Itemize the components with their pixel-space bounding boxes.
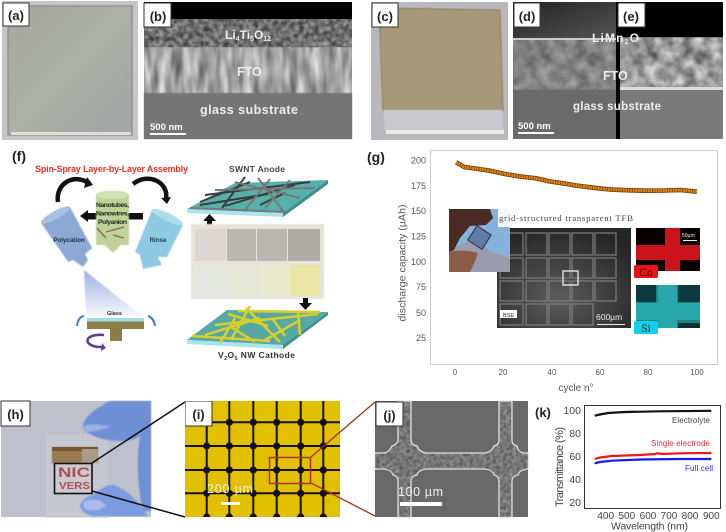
panel j: SEM of grid xyxy=(375,401,528,517)
y axis labels: 200 xyxy=(411,156,426,166)
zoom lines i to j xyxy=(311,402,375,516)
zoom lines h to i xyxy=(92,402,185,517)
label e: (e) xyxy=(623,9,639,24)
heading: cathode: O xyxy=(228,350,235,360)
bottle: rinse: Rinse xyxy=(150,237,167,244)
label j xyxy=(376,402,403,426)
x axis labels: 60 xyxy=(596,368,605,377)
heading: anode: SWNT Anode xyxy=(229,164,285,174)
SWNT anode plate xyxy=(187,177,328,217)
curve: single electrode xyxy=(595,453,711,459)
scale bar b: 500 nm xyxy=(150,122,183,133)
x axis labels xyxy=(597,511,720,522)
inset SEM: 600µm xyxy=(596,312,622,322)
y axis labels: 175 xyxy=(411,181,426,191)
bottle: polycation: Polycation xyxy=(53,237,85,244)
series labels: Electrolyte xyxy=(672,416,711,425)
heading: cathode: NW Cathode xyxy=(238,350,295,360)
label h: (h) xyxy=(7,407,24,422)
x axis labels xyxy=(453,368,704,377)
curve: electrolyte xyxy=(595,411,711,416)
scale bar d: 500 nm xyxy=(518,121,551,132)
x axis title: cycle n° xyxy=(558,383,594,394)
layer text: 5 xyxy=(250,36,254,43)
bottle: nanotubes: Polyanion xyxy=(98,219,127,226)
plot frame xyxy=(430,150,718,364)
x axis labels: 700 xyxy=(661,511,678,522)
panel a: LTO coated glass photo xyxy=(2,1,138,140)
x axis labels: 400 xyxy=(597,511,614,522)
label f: (f) xyxy=(12,148,26,164)
bottle: polycation xyxy=(39,204,92,267)
scale bar i: 200 µm xyxy=(207,482,253,496)
bottle: rinse xyxy=(135,206,185,269)
y axis labels: 80 xyxy=(569,428,581,440)
plot frame xyxy=(584,406,720,508)
down arrow xyxy=(299,298,312,310)
panel f: spin-spray layer-by-layer xyxy=(12,148,328,362)
inset Co map: Co xyxy=(639,267,653,279)
inset title: grid-structured transparent TFB xyxy=(499,213,633,223)
y axis labels: 100 xyxy=(563,405,581,417)
label i: (i) xyxy=(192,407,205,422)
capacity curve xyxy=(456,162,697,192)
layer text d/e: glass substrate xyxy=(573,101,661,113)
up arrow xyxy=(203,214,216,226)
label d: (d) xyxy=(519,9,535,24)
panel d and e: LMO SEM cross sections xyxy=(513,2,723,139)
y axis title: discharge capacity (µAh) xyxy=(396,204,408,322)
layer text: 4 xyxy=(236,36,240,43)
label g: (g) xyxy=(367,149,385,165)
photo of films xyxy=(191,224,324,299)
spray cone xyxy=(84,270,142,316)
layer text d/e: LiMn xyxy=(592,31,623,45)
layer text: Ti xyxy=(240,28,250,42)
x axis labels: 40 xyxy=(548,368,557,377)
label c: (c) xyxy=(377,9,393,24)
y axis title: Transmittance (%) xyxy=(554,427,566,507)
label i xyxy=(185,401,212,426)
inset photo xyxy=(449,209,512,272)
y axis labels xyxy=(411,156,426,343)
label j: (j) xyxy=(383,408,396,423)
x axis labels: 500 xyxy=(618,511,636,522)
x axis labels: 800 xyxy=(682,511,699,522)
inset Co map xyxy=(634,228,700,279)
y axis labels: 25 xyxy=(416,333,426,343)
y axis labels: 60 xyxy=(569,451,581,463)
inset SEM xyxy=(497,228,631,328)
series labels: Single electrode xyxy=(651,439,711,448)
y axis labels: 40 xyxy=(569,474,581,486)
layer text: glass substrate xyxy=(200,103,298,117)
bottle: nanotubes: Nanotubes, xyxy=(96,202,129,209)
cell text xyxy=(58,464,90,492)
inset Co map: 50µm xyxy=(682,233,695,239)
layer text d/e: 2 xyxy=(625,39,629,46)
layer text: 12 xyxy=(263,36,271,43)
label d xyxy=(514,3,540,27)
label h xyxy=(1,401,30,426)
layer text: O xyxy=(254,28,263,42)
panel h: transparent cell photo xyxy=(1,401,151,518)
x axis labels: 600 xyxy=(640,511,657,522)
y axis labels: 150 xyxy=(411,206,426,216)
layer text xyxy=(200,28,298,117)
series labels xyxy=(651,416,713,473)
scale bar j: 100 µm xyxy=(398,485,443,499)
layer text: Li xyxy=(225,28,236,42)
x axis labels: 900 xyxy=(703,511,720,522)
label b xyxy=(144,3,171,27)
bottle: nanotubes xyxy=(96,191,129,253)
cell text: VERS xyxy=(59,481,90,492)
cell text: NIC xyxy=(58,464,90,480)
inset Si map: Si xyxy=(641,323,651,335)
layer text d/e: O xyxy=(630,31,639,45)
horizontal arrow xyxy=(80,210,143,222)
x axis labels: 80 xyxy=(644,368,653,377)
y axis labels: 100 xyxy=(411,257,426,267)
heading: cathode: 2 xyxy=(224,356,227,362)
heading: assembly: Spin-Spray Layer-by-Layer Assembly xyxy=(35,164,188,174)
spin coater xyxy=(77,311,155,351)
x axis labels: 100 xyxy=(690,368,704,377)
heading: cathode: V xyxy=(218,350,224,360)
y axis labels: 125 xyxy=(411,232,426,242)
label e xyxy=(618,3,645,27)
heading: cathode: 5 xyxy=(235,356,238,362)
panel b: LTO SEM cross section xyxy=(144,2,352,139)
panel g: cycling chart xyxy=(367,149,718,394)
panel i: grid micrograph xyxy=(185,401,340,517)
y axis labels xyxy=(563,405,581,509)
label k: (k) xyxy=(535,405,551,420)
scale bar i xyxy=(207,482,253,505)
curved arrows xyxy=(58,177,171,204)
series labels: Full cell xyxy=(685,464,713,473)
zoom box xyxy=(270,458,310,484)
layer text: FTO xyxy=(237,65,262,79)
curve: full cell xyxy=(595,459,711,463)
panel c: LMO coated glass photo xyxy=(371,2,508,140)
label b: (b) xyxy=(150,9,166,24)
bottle: nanotubes: Nanowires, xyxy=(96,210,129,218)
cathode plate xyxy=(187,306,328,349)
layer text d/e: FTO xyxy=(603,69,628,83)
y axis labels: 75 xyxy=(416,282,426,292)
y axis labels: 20 xyxy=(569,497,581,509)
x axis labels: 0 xyxy=(453,368,458,377)
y axis labels: 50 xyxy=(416,308,426,318)
label a: (a) xyxy=(8,8,24,23)
layer text d/e xyxy=(573,31,661,113)
x axis labels: 20 xyxy=(499,368,508,377)
panel k: transmittance chart xyxy=(535,405,720,532)
spin coater: Glass xyxy=(107,311,122,317)
inset SEM: BSE xyxy=(503,313,514,319)
scale bar j xyxy=(398,485,443,506)
inset Si map xyxy=(634,285,700,335)
